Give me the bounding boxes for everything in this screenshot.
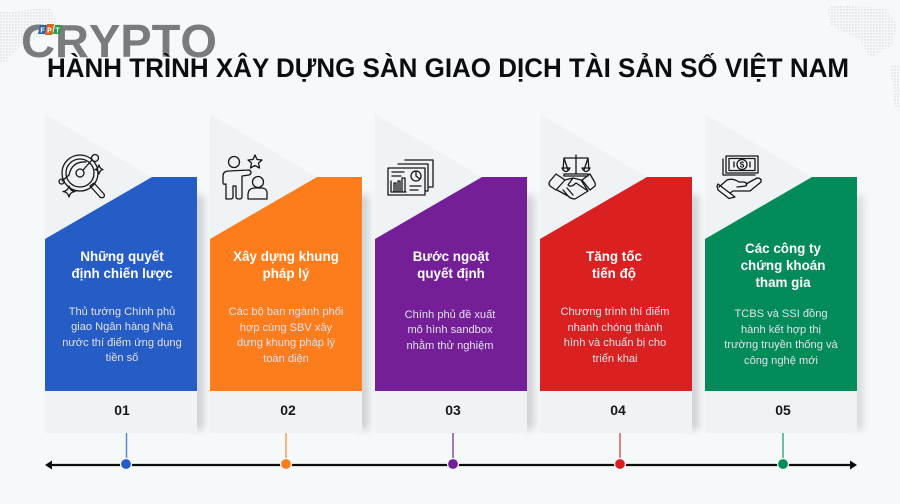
logo: FPT badge: T xyxy=(55,28,60,34)
heading: quyết định xyxy=(417,266,485,281)
logo: FPT badge xyxy=(38,24,62,35)
body text: toàn diện xyxy=(263,353,309,365)
body text: dựng khung pháp lý xyxy=(237,337,335,349)
number: 04 xyxy=(610,402,626,418)
icon: report sheets xyxy=(388,160,433,195)
heading: pháp lý xyxy=(263,266,310,281)
body text: nhằm thử nghiệm xyxy=(407,339,493,352)
heading: Bước ngoặt xyxy=(413,249,490,264)
logo: CRYPTO wordmark: CRYPTO xyxy=(21,15,217,67)
body text: Các bộ ban ngành phối xyxy=(229,306,343,318)
panel: step 5 xyxy=(705,114,863,433)
icon: people and star xyxy=(223,155,267,199)
timeline marker 1 xyxy=(120,433,132,470)
timeline arrow xyxy=(45,433,857,470)
body text: TCBS và SSI đồng xyxy=(734,308,828,320)
panel: step 4 xyxy=(540,114,699,433)
body text: hình và chuẩn bị cho xyxy=(564,337,666,349)
heading: Xây dựng khung xyxy=(233,249,339,264)
body text: nhanh chóng thành xyxy=(567,322,663,334)
icon: hand holding money: $ xyxy=(740,160,745,170)
heading: tiến độ xyxy=(592,266,636,281)
icon: magnifier with radar xyxy=(59,154,104,198)
heading: Các công ty xyxy=(745,241,821,256)
timeline marker 2 xyxy=(280,433,292,470)
heading: Tăng tốc xyxy=(586,249,642,264)
number: 03 xyxy=(445,402,461,418)
body text: Chính phủ đề xuất xyxy=(405,309,495,321)
number: 01 xyxy=(114,402,130,418)
number: 05 xyxy=(775,402,791,418)
heading: chứng khoán xyxy=(741,258,825,273)
logo: FPT badge: F xyxy=(40,28,45,34)
number: 02 xyxy=(280,402,296,418)
body text: mô hình sandbox xyxy=(407,324,493,336)
timeline marker 5 xyxy=(778,433,788,470)
body text: triển khai xyxy=(592,353,638,365)
body text: tiền số xyxy=(106,352,138,364)
heading: Những quyết xyxy=(80,249,164,264)
body text: nước thí điểm ứng dụng xyxy=(62,337,182,349)
body text: Thủ tướng Chính phủ xyxy=(69,306,175,318)
body text: công nghệ mới xyxy=(744,355,818,367)
body text: hành kết hợp thị xyxy=(741,324,821,336)
panel: step 2 xyxy=(210,114,369,433)
logo: FPT badge: P xyxy=(47,28,52,34)
panel: step 1 xyxy=(45,114,204,433)
body text: giao Ngân hàng Nhà xyxy=(71,321,174,333)
panel: step 3 xyxy=(375,114,534,433)
body text: Chương trình thí điểm xyxy=(560,306,670,318)
icon: hand holding money xyxy=(717,156,761,198)
title: HÀNH TRÌNH XÂY DỰNG SÀN GIAO DỊCH TÀI SẢN SỐ VIỆT NAM xyxy=(47,53,849,83)
body text: hợp cùng SBV xây xyxy=(240,322,333,334)
icon: scales and handshake xyxy=(549,155,595,199)
heading: định chiến lược xyxy=(71,266,173,281)
timeline marker 4 xyxy=(614,433,626,470)
body text: trường truyền thống và xyxy=(724,339,839,351)
heading: tham gia xyxy=(755,275,811,290)
timeline marker 3 xyxy=(448,433,458,470)
